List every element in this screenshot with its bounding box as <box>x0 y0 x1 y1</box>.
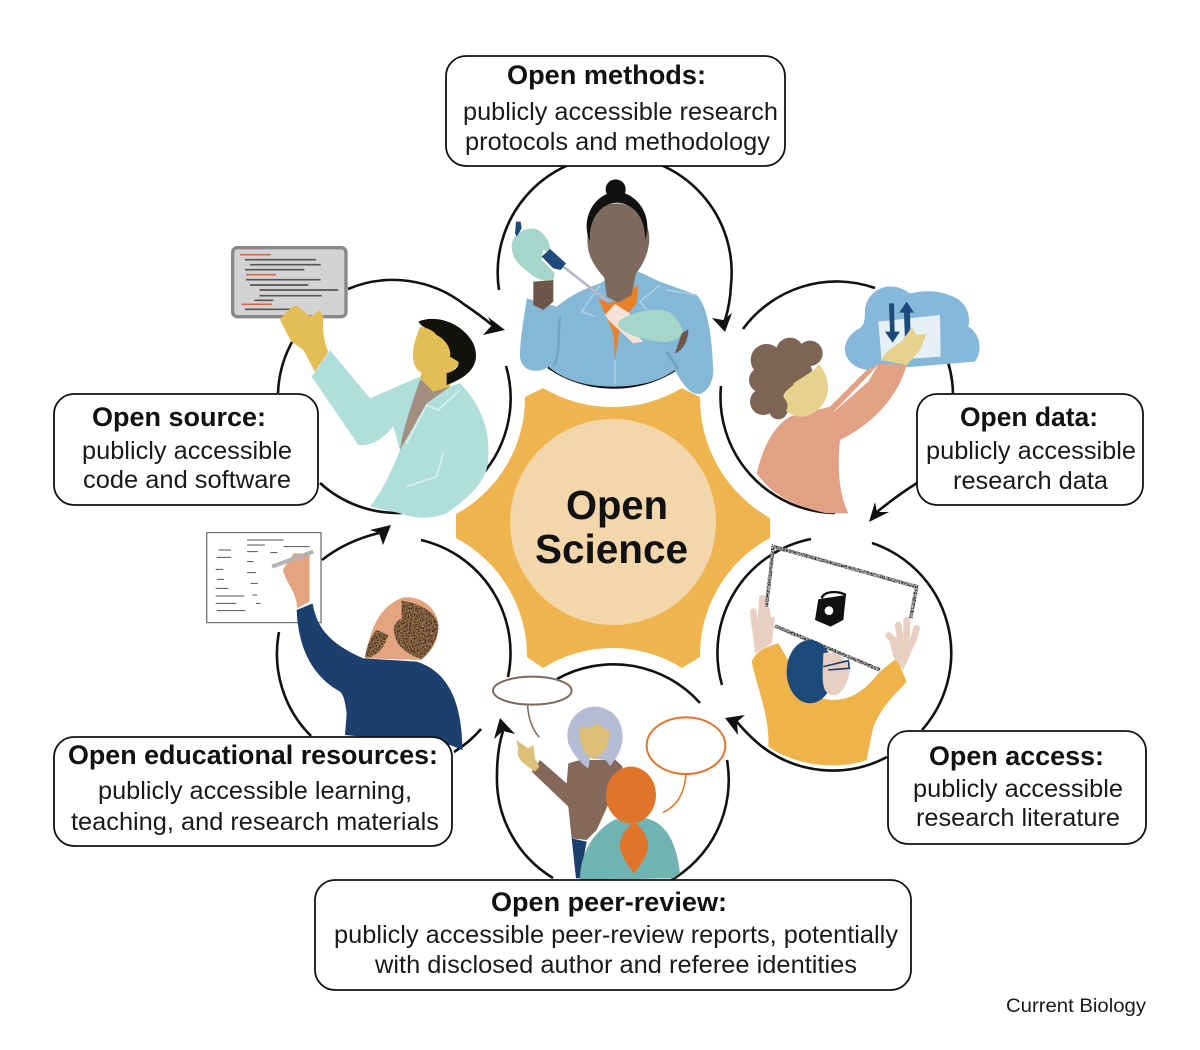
figure: person uploading to data cloud <box>749 287 980 513</box>
box: open data: Open data: <box>960 402 1098 432</box>
figure: speech bubbles and peer reviewers <box>493 677 725 880</box>
box: open access: Open access: <box>929 741 1104 771</box>
box: open data: research data <box>953 467 1108 495</box>
box: open data: publicly accessible <box>926 437 1136 465</box>
box: open source: code and software <box>83 466 291 494</box>
figure: person holding open access frame <box>752 547 917 765</box>
central Open Science badge: Science <box>535 526 688 572</box>
source credit: Current Biology <box>1006 995 1146 1017</box>
box: open methods: publicly accessible research <box>463 98 778 126</box>
box: open access <box>888 731 1146 844</box>
box: open educational resources <box>54 737 452 846</box>
box: open educational resources: publicly accessible learning, <box>98 777 412 805</box>
box: open access: publicly accessible <box>913 775 1123 803</box>
box: open peer-review <box>315 880 911 990</box>
figure: open source researcher with code screen <box>233 248 488 518</box>
box: open methods: protocols and methodology <box>465 128 771 156</box>
box: open methods <box>446 56 785 166</box>
figure: researcher with pipette <box>512 179 713 394</box>
box: open methods: Open methods: <box>507 60 706 90</box>
annotated document <box>207 533 321 623</box>
box: open source: publicly accessible <box>82 437 292 465</box>
box: open source: Open source: <box>92 402 266 432</box>
figure: educator annotating document <box>207 533 463 750</box>
box: open peer-review: publicly accessible peer-review reports, potentially <box>334 921 899 949</box>
box: open access: research literature <box>916 804 1120 832</box>
central Open Science badge: Open <box>566 482 668 528</box>
box: open educational resources: teaching, and research materials <box>71 808 439 836</box>
box: open data <box>917 394 1143 505</box>
box: open educational resources: Open educational resources: <box>68 740 438 770</box>
cycle arcs and arrows <box>277 155 953 882</box>
central Open Science badge <box>456 388 770 668</box>
box: open source <box>54 394 318 505</box>
box: open peer-review: with disclosed author and referee identities <box>374 951 857 979</box>
box: open peer-review: Open peer-review: <box>491 887 727 917</box>
educator body and head <box>297 597 463 750</box>
